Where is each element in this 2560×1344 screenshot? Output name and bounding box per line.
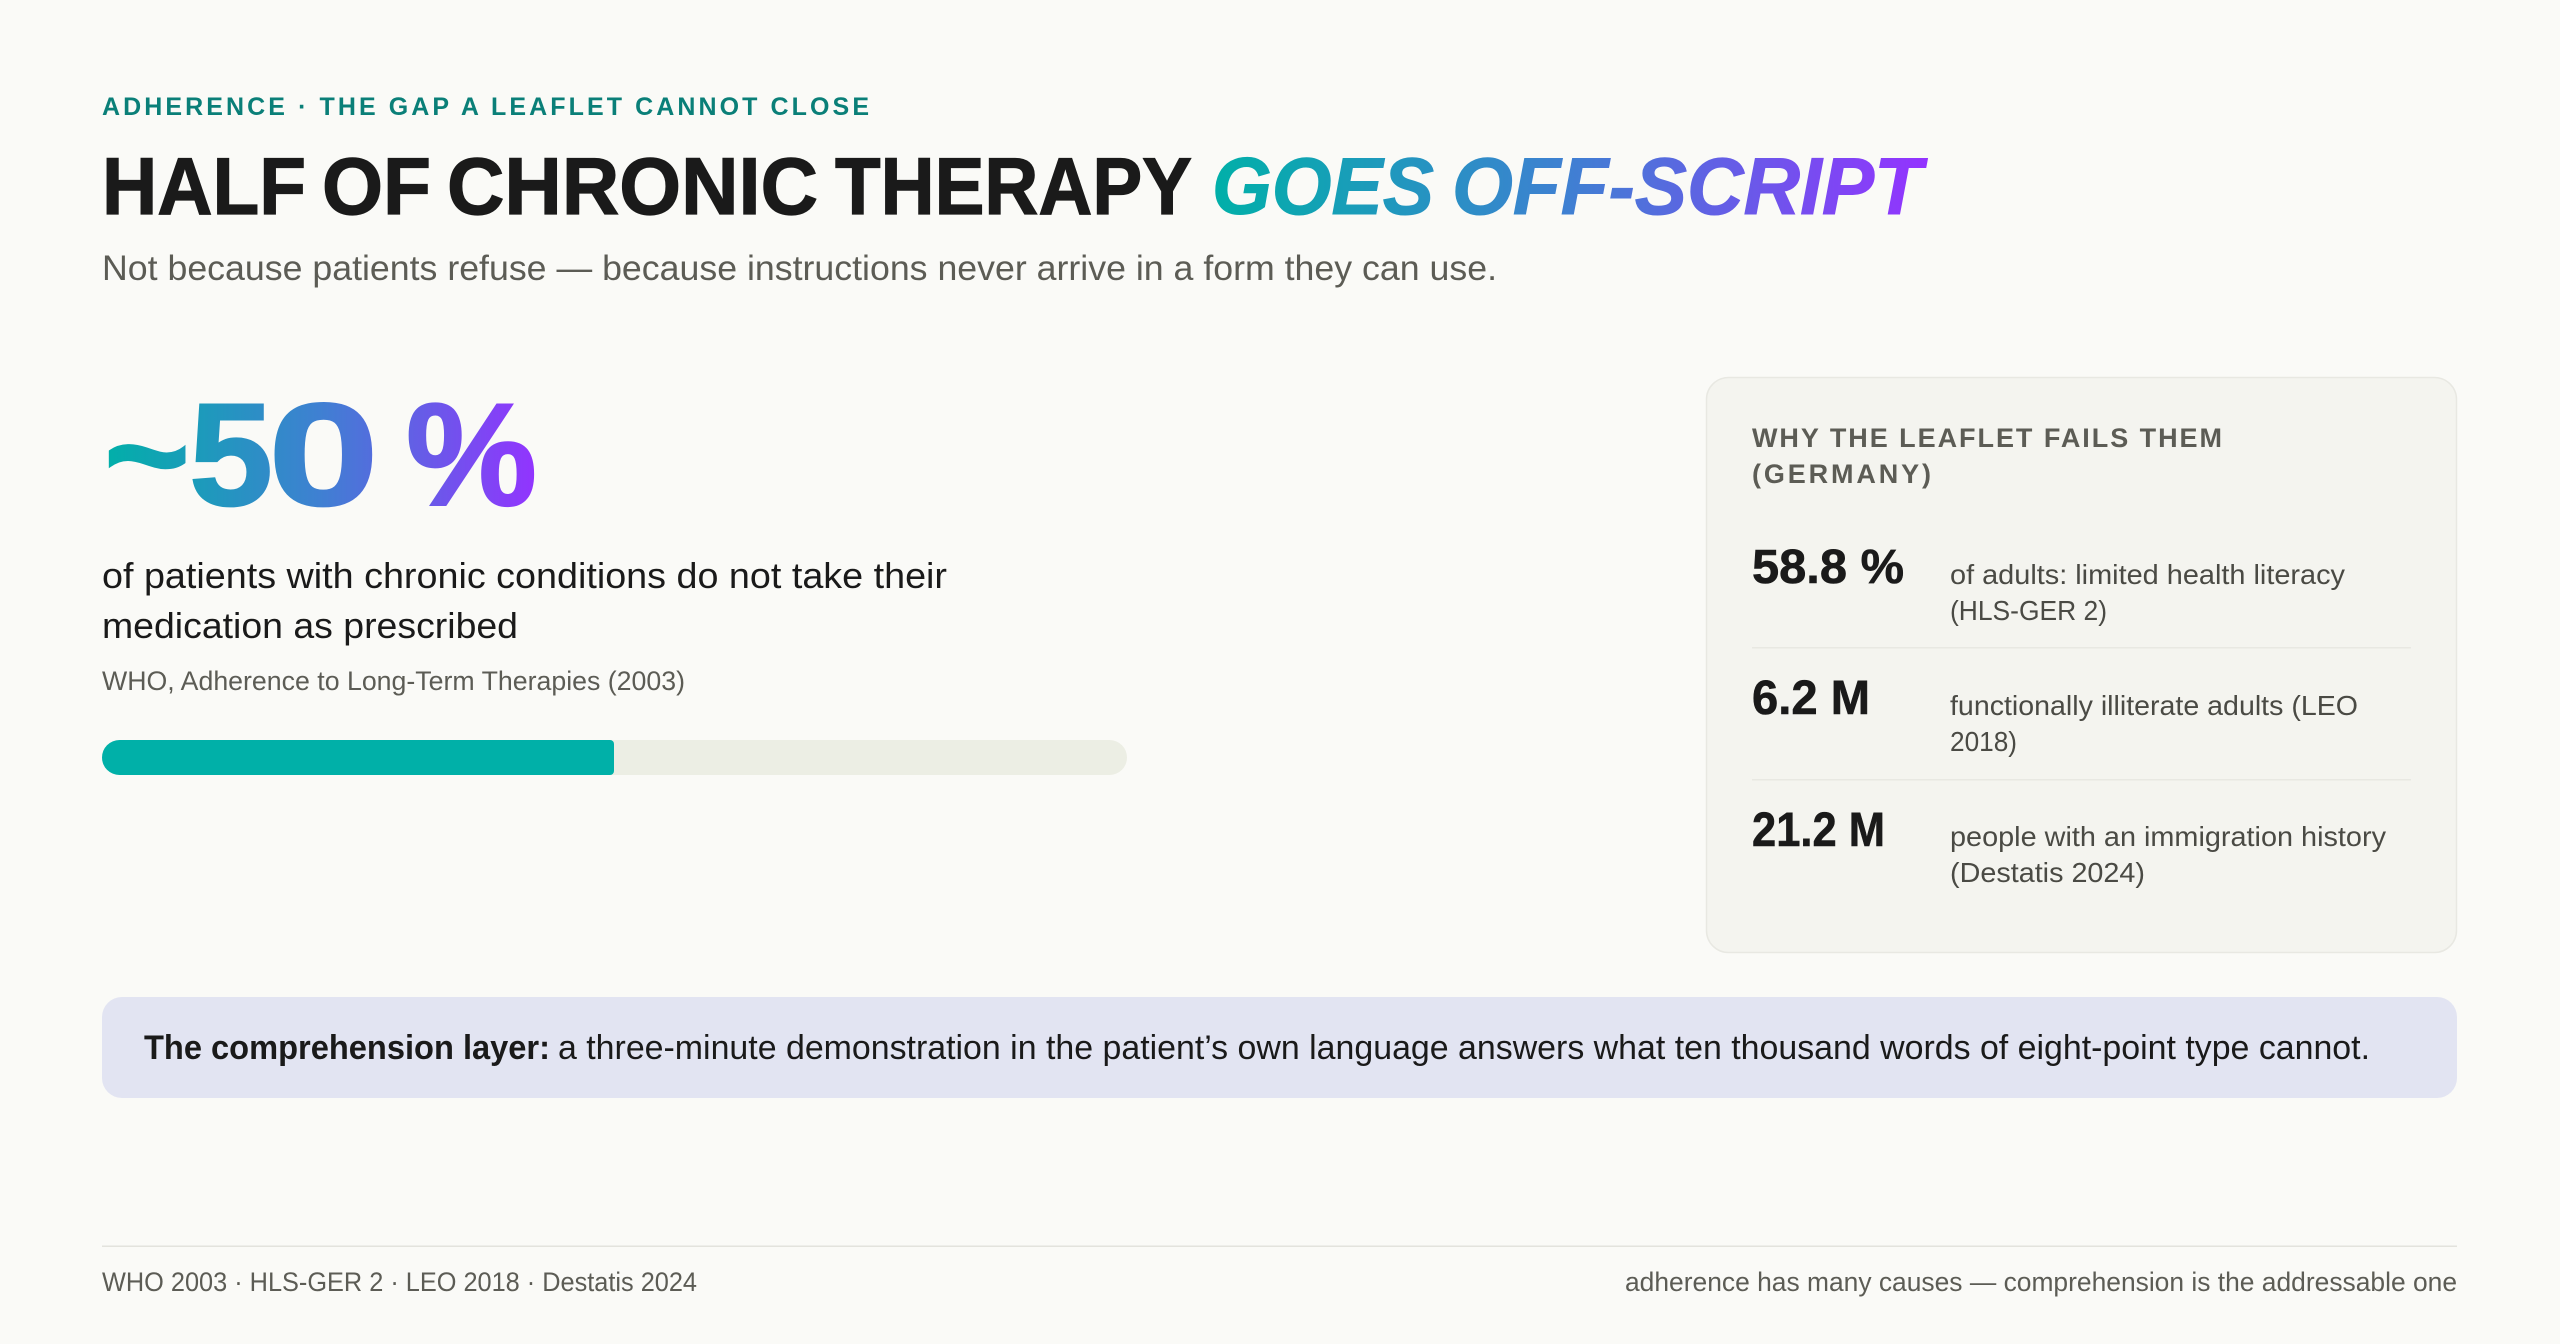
title: OFF-SCRIPT	[1452, 142, 1928, 232]
stat row: functional illiteracy: 6.2 M	[1752, 672, 1870, 725]
stat row: functional illiteracy	[1752, 672, 2358, 757]
stat row: health literacy	[1752, 541, 2345, 626]
stat row: health literacy: 58.8 %	[1752, 541, 1904, 594]
title: OF	[322, 142, 431, 232]
subtitle: Not because patients refuse — because instructions never arrive in a form they can use.	[102, 249, 1497, 288]
stat row: immigration history: (Destatis 2024)	[1950, 857, 2145, 888]
title: GOES	[1212, 142, 1434, 232]
big number	[104, 373, 537, 536]
callout: comprehension layer: a three-minute demonstration in the patient’s own language answers what ten thousand words of eight-point type cannot.	[558, 1029, 2370, 1067]
title: THERAPY	[835, 142, 1192, 232]
statistic description: of patients with chronic conditions do not take their	[102, 555, 947, 596]
stat row: immigration history: people with an immigration history	[1950, 821, 2386, 852]
panel: why the leaflet fails them	[1706, 378, 2456, 952]
stat row: health literacy: of adults: limited health literacy	[1950, 559, 2345, 590]
panel heading: (GERMANY)	[1752, 459, 1931, 489]
stat row: functional illiteracy: 2018)	[1950, 726, 2017, 757]
big number: ~	[104, 373, 190, 536]
progress bar: 50 percent	[102, 740, 1127, 775]
eyebrow: ADHERENCE · THE GAP A LEAFLET CANNOT CLOSE	[102, 93, 869, 121]
stat row: immigration history	[1752, 804, 2386, 888]
panel: headline statistic	[102, 373, 1127, 775]
statistic description	[102, 555, 947, 646]
title: HALF	[102, 142, 306, 232]
title	[102, 142, 1928, 232]
stat row: functional illiteracy: functionally illiterate adults (LEO	[1950, 690, 2358, 721]
stat row: health literacy: (HLS-GER 2)	[1950, 595, 2107, 626]
panel heading: WHY THE LEAFLET FAILS THEM	[1752, 423, 2222, 453]
big number: 0	[268, 373, 379, 536]
callout: comprehension layer: The comprehension layer:	[144, 1029, 550, 1067]
stat row: immigration history: 21.2 M	[1752, 804, 1885, 857]
footer: note: adherence has many causes — comprehension is the addressable one	[1625, 1267, 2457, 1297]
big number: %	[406, 373, 537, 536]
panel heading	[1752, 423, 2222, 489]
footer: sources: WHO 2003 · HLS-GER 2 · LEO 2018 · Destatis 2024	[102, 1267, 697, 1297]
callout: comprehension layer	[102, 997, 2457, 1098]
statistic source: WHO, Adherence to Long-Term Therapies (2003)	[102, 666, 685, 696]
title: CHRONIC	[447, 142, 818, 232]
big number: 5	[189, 373, 273, 536]
statistic description: medication as prescribed	[102, 605, 518, 646]
